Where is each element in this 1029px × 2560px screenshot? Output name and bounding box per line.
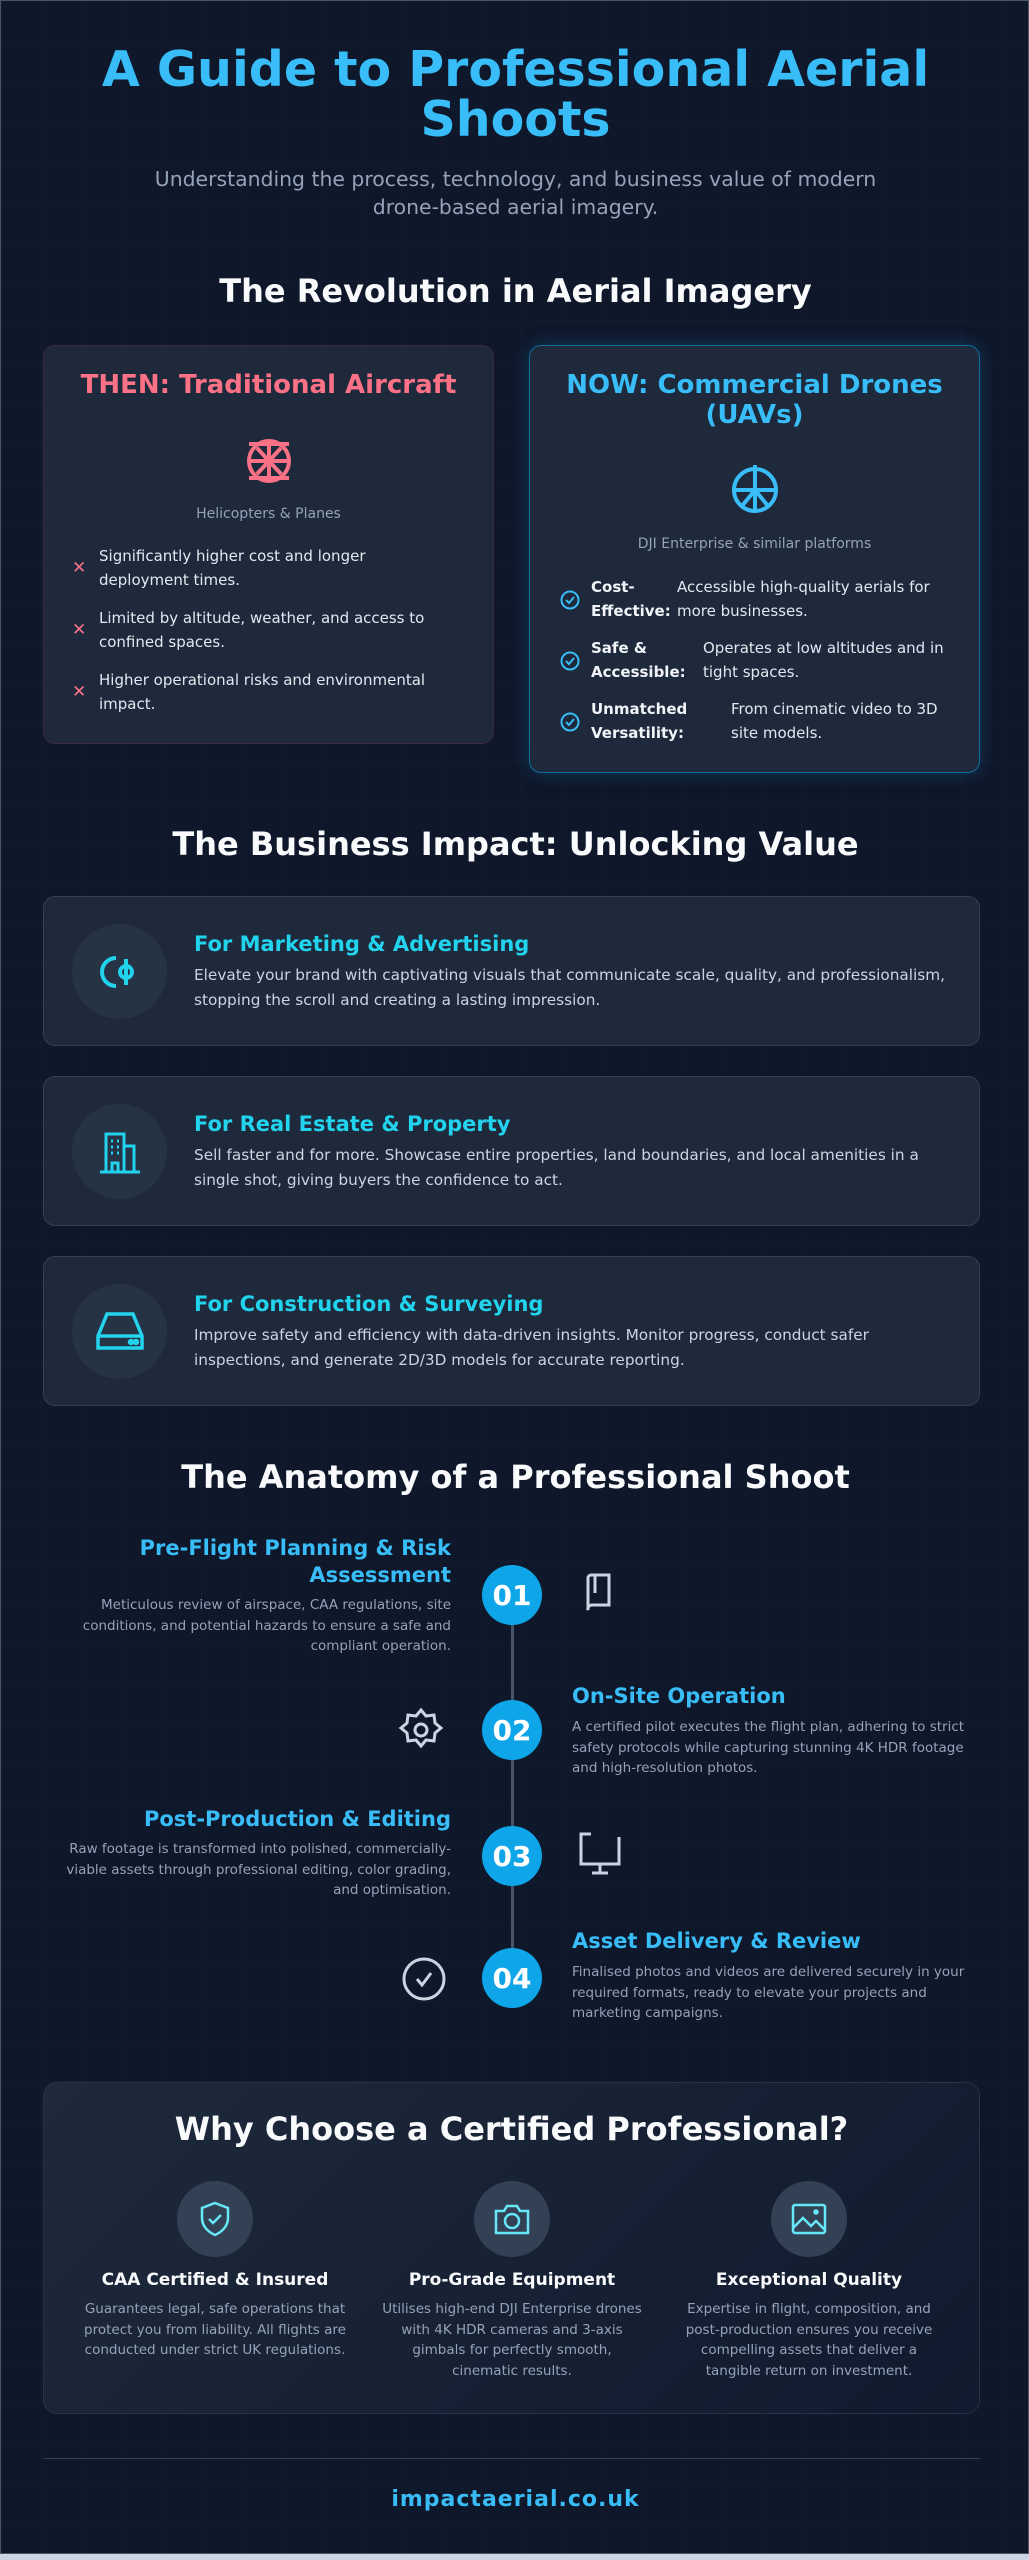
panel: then xyxy=(43,345,494,744)
title xyxy=(102,41,929,148)
benefit 1: Accessible high-quality aerials for more businesses. xyxy=(677,578,930,620)
card: real estate: For Real Estate & Property xyxy=(194,1112,510,1136)
now title: NOW: Commercial Drones xyxy=(566,370,943,400)
card: marketing: For Marketing & Advertising xyxy=(194,932,529,956)
icon: drone xyxy=(732,465,778,513)
benefit 2: Safe & xyxy=(591,639,647,657)
icon: helicopter xyxy=(247,439,291,483)
benefit 3: Unmatched xyxy=(591,700,687,718)
step 2: A certified pilot executes the flight plan, adhering to strict safety protocols while capturing stunning 4K HDR footage and high-resolution photos. xyxy=(572,1719,964,1776)
feature: quality xyxy=(686,2181,932,2378)
feature: quality: Exceptional Quality xyxy=(716,2270,902,2290)
feature: equipment: Pro-Grade Equipment xyxy=(409,2270,615,2290)
feature: quality: Expertise in flight, composition, and post-production ensures you receive compelling assets that deliver a tangible return on investment. xyxy=(686,2301,932,2378)
icon: book xyxy=(586,1574,610,1610)
feature: equipment: Utilises high-end DJI Enterprise drones with 4K HDR cameras and 3-axis gimbals for perfectly smooth, cinematic results. xyxy=(382,2301,642,2378)
step 2: On-Site Operation xyxy=(572,1684,786,1708)
step 3: Post-Production & Editing xyxy=(144,1807,451,1831)
step 1: 01 xyxy=(493,1578,531,1612)
step 3 xyxy=(66,1807,620,1898)
heading: revolution: The Revolution in Aerial Imagery xyxy=(219,272,812,310)
subtitle xyxy=(155,167,876,219)
timeline xyxy=(66,1536,964,2021)
benefit 2: Accessible: xyxy=(591,663,686,681)
step 4: Finalised photos and videos are delivered securely in your required formats, ready to elevate your projects and marketing campaigns. xyxy=(572,1964,964,2021)
subtitle: drone-based aerial imagery. xyxy=(373,195,658,219)
now title: (UAVs) xyxy=(705,400,804,430)
benefit 2 xyxy=(560,639,944,681)
benefit 1 xyxy=(560,578,930,620)
card: construction: Improve safety and efficiency with data-driven insights. Monitor progress, conduct safer inspections, and generate 2D/3D models for accurate reporting. xyxy=(194,1326,869,1369)
panel: now xyxy=(529,345,980,773)
step 1: Pre-Flight Planning & Risk Assessment xyxy=(140,1536,451,1587)
card: real estate xyxy=(43,1076,980,1226)
step 4: 04 xyxy=(493,1962,531,1994)
bullet 3: Higher operational risks and environmental impact. xyxy=(99,671,425,713)
step 3: 03 xyxy=(493,1840,531,1872)
benefit 1: Effective: xyxy=(591,602,671,620)
bullet 3: ✕ xyxy=(72,682,86,702)
card: marketing: Elevate your brand with captivating visuals that communicate scale, quality, and professionalism, stopping the scroll and creating a lasting impression. xyxy=(194,966,945,1009)
card: real estate: Sell faster and for more. Showcase entire properties, land boundaries, and local amenities in a single shot, giving buyers the confidence to act. xyxy=(194,1146,919,1189)
benefit 2: Operates at low altitudes and in tight spaces. xyxy=(703,639,944,681)
icon: check circle xyxy=(402,1958,446,2000)
subtitle: Understanding the process, technology, and business value of modern xyxy=(155,167,876,191)
feature: certified: Guarantees legal, safe operations that protect you from liability. All flights are conducted under strict UK regulations. xyxy=(84,2301,346,2358)
title: Shoots xyxy=(420,91,611,148)
card: marketing xyxy=(43,896,980,1046)
benefit 3 xyxy=(560,700,938,742)
icon: marketing xyxy=(72,924,167,1019)
step 1 xyxy=(83,1536,610,1654)
bullet 2: Limited by altitude, weather, and access to confined spaces. xyxy=(99,609,424,651)
why title: Why Choose a Certified Professional? xyxy=(175,2110,848,2148)
caption: Helicopters & Planes xyxy=(196,506,341,522)
icon: monitor xyxy=(580,1832,620,1874)
then title: THEN: Traditional Aircraft xyxy=(81,370,456,400)
now title xyxy=(566,370,943,430)
footer: impactaerial.co.uk xyxy=(391,2487,640,2512)
feature: equipment xyxy=(382,2181,642,2378)
step 2 xyxy=(398,1684,964,1776)
icon: drive xyxy=(72,1284,167,1379)
panel: why choose xyxy=(43,2082,980,2414)
feature: certified xyxy=(84,2181,346,2358)
benefit 1: Cost- xyxy=(591,578,635,596)
feature: certified: CAA Certified & Insured xyxy=(102,2270,328,2290)
icon: building xyxy=(72,1104,167,1199)
bullet list xyxy=(72,547,425,713)
card: construction xyxy=(43,1256,980,1406)
step 1: Meticulous review of airspace, CAA regulations, site conditions, and potential hazards to ensure a safe and compliant operation. xyxy=(83,1597,451,1654)
caption: DJI Enterprise & similar platforms xyxy=(638,536,871,552)
bullet 1: Significantly higher cost and longer deployment times. xyxy=(99,547,365,589)
step 3: Raw footage is transformed into polished, commercially-viable assets through professional editing, color grading, and optimisation. xyxy=(66,1841,451,1898)
step 4 xyxy=(402,1929,964,2021)
benefit 3: From cinematic video to 3D site models. xyxy=(731,700,938,742)
bullet 1: ✕ xyxy=(72,558,86,578)
heading: anatomy: The Anatomy of a Professional Shoot xyxy=(181,1458,850,1496)
title: A Guide to Professional Aerial xyxy=(102,41,929,98)
step 4: Asset Delivery & Review xyxy=(572,1929,861,1953)
bullet 2: ✕ xyxy=(72,620,86,640)
heading: business impact: The Business Impact: Unlocking Value xyxy=(172,825,859,863)
icon: gear xyxy=(398,1708,444,1748)
benefit 3: Versatility: xyxy=(591,724,684,742)
step 2: 02 xyxy=(493,1714,531,1746)
card: construction: For Construction & Surveying xyxy=(194,1292,543,1316)
